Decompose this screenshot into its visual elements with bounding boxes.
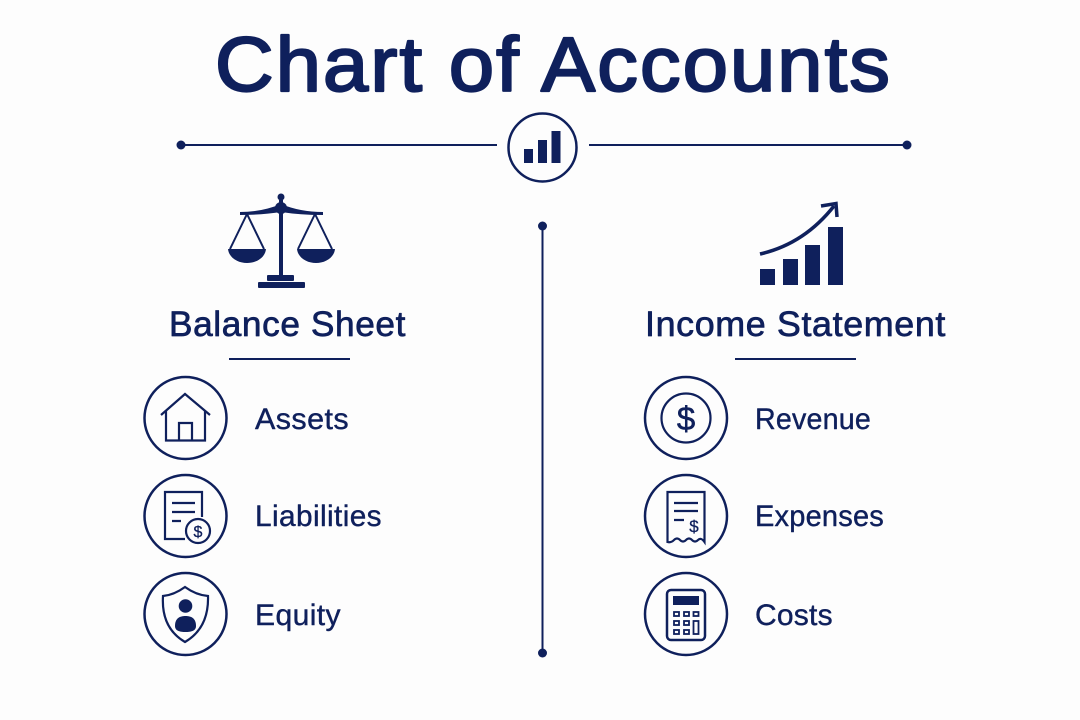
item: expenses: Expenses bbox=[755, 500, 884, 533]
item: liabilities: Liabilities bbox=[255, 500, 382, 533]
icon: rising bars with arrow bbox=[760, 204, 843, 285]
item: costs: Costs bbox=[755, 599, 833, 632]
center vertical divider bbox=[538, 222, 547, 658]
item: liabilities bbox=[144, 475, 382, 557]
item: expenses: $ bbox=[689, 517, 699, 536]
heading: balance sheet: Balance Sheet bbox=[169, 305, 406, 344]
item: expenses bbox=[645, 475, 884, 557]
item: revenue: Revenue bbox=[755, 403, 871, 436]
item: liabilities: $ bbox=[194, 524, 203, 541]
item: costs bbox=[645, 573, 833, 655]
item: assets bbox=[144, 377, 349, 459]
panel: balance sheet bbox=[144, 194, 406, 655]
item: assets: Assets bbox=[255, 403, 349, 436]
icon: balance scale bbox=[228, 194, 335, 288]
panel: income statement bbox=[645, 204, 946, 655]
item: equity: Equity bbox=[255, 599, 341, 632]
item: equity bbox=[144, 573, 341, 655]
title: Chart of Accounts bbox=[215, 22, 892, 108]
header divider with chart icon bbox=[176, 114, 912, 182]
heading: income statement: Income Statement bbox=[645, 305, 946, 344]
item: revenue: $ bbox=[677, 400, 695, 437]
item: revenue bbox=[645, 377, 871, 459]
